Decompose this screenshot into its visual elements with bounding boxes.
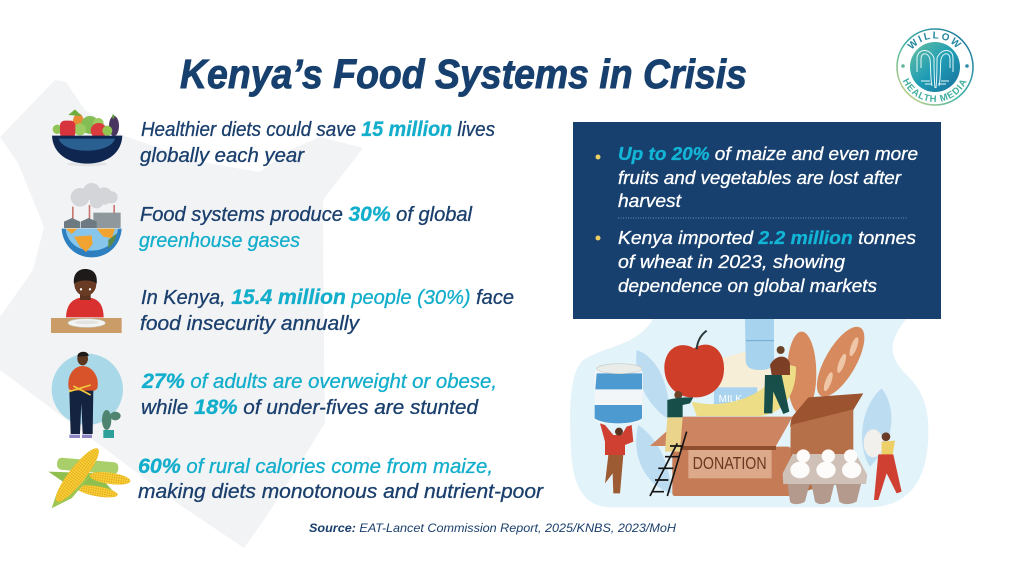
text: globally each year: globally each year bbox=[140, 145, 305, 167]
banana bbox=[692, 363, 796, 416]
tin can bbox=[595, 367, 643, 423]
source note: Source: EAT-Lancet Commission Report, 2025/KNBS, 2023/MoH bbox=[309, 521, 676, 535]
panel text: imports line 3: dependence on global markets bbox=[618, 276, 877, 296]
person on box with bottle bbox=[777, 346, 785, 354]
person on ladder bbox=[674, 391, 682, 399]
background map of Kenya bbox=[0, 80, 363, 548]
text: in Kenya: In Kenya, 15.4 million people (30%) face bbox=[141, 286, 514, 309]
illustration: donation box bbox=[570, 318, 928, 507]
logo: Willow Health Media: WILLOW bbox=[906, 32, 962, 49]
box bbox=[790, 393, 863, 427]
title: Kenya’s Food Systems in Crisis bbox=[180, 51, 747, 97]
bullet bbox=[596, 154, 600, 160]
panel: post-harvest losses and imports bbox=[573, 122, 941, 319]
water bottle bbox=[745, 318, 774, 370]
text: stunted: while 18% of under-fives are stunted bbox=[141, 396, 479, 419]
panel text: losses line 2: fruits and vegetables are lost after bbox=[618, 168, 902, 188]
baguettes bbox=[787, 320, 874, 415]
panel text: imports line 2: of wheat in 2023, showing bbox=[618, 252, 845, 272]
icon: maize cobs bbox=[48, 444, 131, 508]
text: rural calories: 60% of rural calories come from maize, bbox=[138, 455, 493, 478]
text: food insecurity annually: food insecurity annually bbox=[140, 313, 360, 335]
person holding can bbox=[600, 423, 633, 455]
logo: Willow Health Media bbox=[896, 28, 974, 106]
milk carton bbox=[717, 352, 770, 407]
panel text: losses line 3: harvest bbox=[618, 191, 682, 211]
egg tray bbox=[787, 482, 862, 504]
box label: DONATION bbox=[693, 453, 767, 473]
text: food systems: Food systems produce 30% of global bbox=[140, 203, 473, 226]
text: overweight: 27% of adults are overweight or obese, bbox=[141, 370, 497, 393]
bullet bbox=[596, 236, 600, 240]
icon: bowl of vegetables bbox=[52, 109, 122, 166]
person with egg bbox=[864, 429, 883, 457]
text: greenhouse gases: greenhouse gases bbox=[139, 230, 300, 252]
apple bbox=[664, 345, 724, 397]
text: healthier diets: Healthier diets could save 15 million lives bbox=[141, 118, 495, 141]
panel text: imports: Kenya imported 2.2 million tonnes bbox=[618, 228, 916, 248]
illustration: donation box: MILK bbox=[719, 394, 742, 405]
icon: child at empty plate bbox=[51, 269, 122, 333]
text: monotonous diets: making diets monotonous and nutrient-poor bbox=[138, 481, 544, 503]
logo: Willow Health Media: HEALTH MEDIA bbox=[902, 78, 967, 102]
icon: factory on globe bbox=[62, 183, 122, 257]
icon: overweight adult with tape measure bbox=[52, 352, 123, 438]
panel text: losses: Up to 20% of maize and even more bbox=[618, 144, 918, 164]
